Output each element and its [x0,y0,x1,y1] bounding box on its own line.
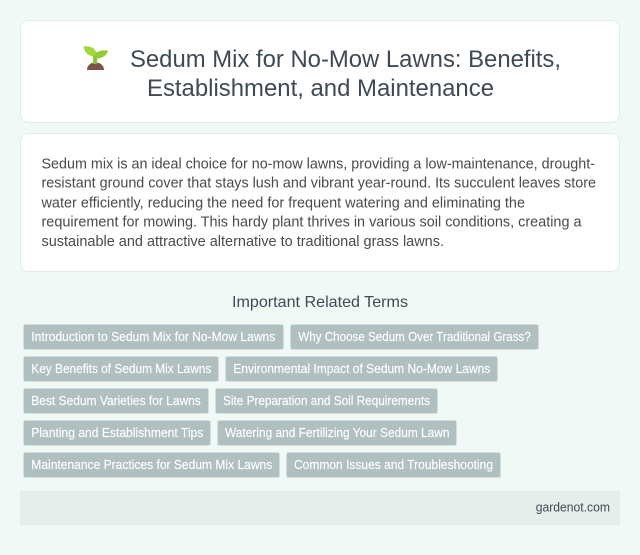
tag: environmental impact [226,356,498,382]
text block: sedum description: resistant ground cover that stays lush and vibrant year-round. Its succulent leaves store [42,176,596,192]
text block: sedum description: sustainable and attractive alternative to traditional grass lawns. [42,234,444,250]
tag: planting [24,420,210,446]
icon: seedling [84,46,108,70]
tag: why choose sedum [290,324,538,350]
tag: watering: Watering and Fertilizing Your Sedum Lawn [225,426,450,440]
tag: introduction [24,324,284,350]
text block: sedum description [41,156,596,250]
footer: gardenot.com [536,501,610,515]
tag: maintenance [24,452,280,478]
tag: common issues: Common Issues and Troubleshooting [294,458,493,472]
tag: watering [218,420,456,446]
text block: sedum description: Sedum mix is an ideal choice for no-mow lawns, providing a low-maintenance, drought- [42,156,595,172]
tag: maintenance: Maintenance Practices for Sedum Mix Lawns [31,458,272,472]
tag: environmental impact: Environmental Impact of Sedum No-Mow Lawns [233,362,490,376]
panel: introduction text [20,134,620,272]
tag: common issues [286,452,500,478]
tag: planting: Planting and Establishment Tips [31,426,203,440]
heading: important related terms: Important Related Terms [232,294,408,311]
text block: sedum description: water efficiently, reducing the need for frequent watering and eliminating the [41,196,525,212]
text block: sedum description: requirement for mowing. This hardy plant thrives in various soil conditions, creating a [42,215,582,231]
tag list [24,324,538,478]
panel: title card [20,20,620,122]
tag: site preparation: Site Preparation and Soil Requirements [223,394,430,408]
tag: key benefits [24,356,218,382]
tag: introduction: Introduction to Sedum Mix for No-Mow Lawns [31,330,275,344]
title: Sedum Mix for No-Mow Lawns: Benefits, [130,46,561,73]
tag: best varieties [24,388,208,414]
tag: best varieties: Best Sedum Varieties for Lawns [31,394,201,408]
footer [20,491,620,525]
title [130,46,561,102]
title: Establishment, and Maintenance [147,75,494,102]
tag: site preparation [216,388,438,414]
tag: why choose sedum: Why Choose Sedum Over Traditional Grass? [298,330,531,344]
tag: key benefits: Key Benefits of Sedum Mix Lawns [31,362,211,376]
